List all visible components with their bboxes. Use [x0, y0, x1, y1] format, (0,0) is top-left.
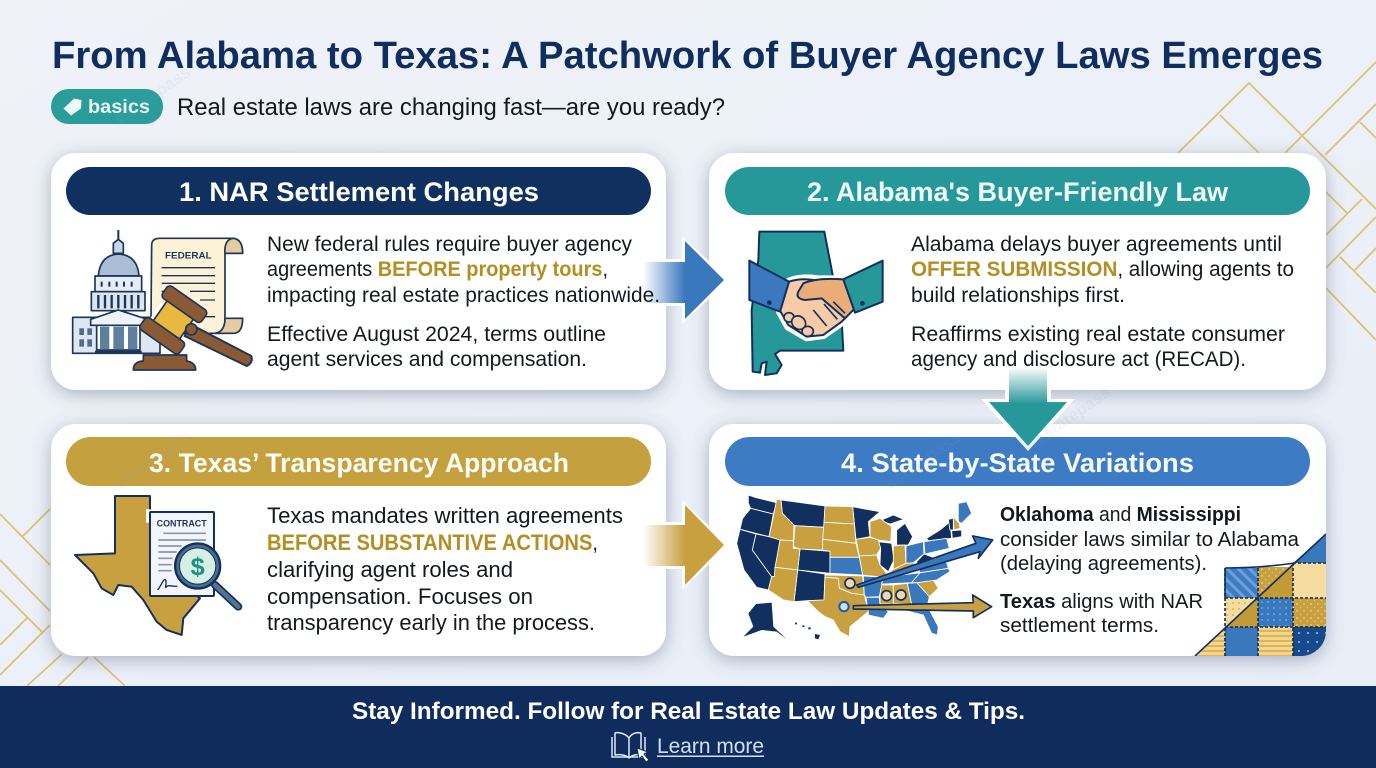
panel: Texas' transparency approach — [51, 424, 666, 656]
icon: Texas with contract and magnifier: $ — [191, 553, 205, 581]
heading: panel 3 — [66, 437, 651, 486]
tag: basics: basics — [88, 96, 150, 118]
heading: panel 1 — [66, 167, 651, 215]
text: panel 2: Alabama delays buyer agreements until — [911, 233, 1282, 256]
subtitle: Real estate laws are changing fast—are you ready? — [177, 94, 725, 121]
watermarks: estatepass — [111, 427, 194, 493]
arrow: panel 2 to panel 4 — [981, 367, 1075, 451]
text: panel 1 — [267, 233, 660, 371]
text: panel 4: (delaying agreements). — [1000, 552, 1207, 575]
panel: state-by-state variations — [709, 424, 1326, 656]
text: panel 4: consider laws similar to Alabama — [1000, 528, 1300, 551]
link: learn more: Learn more — [657, 735, 764, 758]
text: panel 2 — [911, 233, 1294, 371]
text: panel 3: clarifying agent roles and — [267, 557, 513, 582]
text: panel 1: New federal rules require buyer agency — [267, 233, 632, 256]
text: panel 2: agency and disclosure act (RECAD). — [911, 348, 1246, 371]
watermarks: estatepass — [111, 62, 194, 128]
arrow: panel 1 to panel 2 — [643, 236, 729, 324]
panel: NAR settlement changes — [51, 153, 666, 390]
arrow: Oklahoma and Mississippi callout — [857, 536, 993, 587]
tag: basics — [51, 89, 163, 124]
title: From Alabama to Texas: A Patchwork of Buyer Agency Laws Emerges — [52, 35, 1323, 77]
footer band — [0, 686, 1376, 768]
heading: panel 3: 3. Texas’ Transparency Approach — [149, 448, 569, 478]
text: panel 4: settlement terms. — [1000, 614, 1159, 637]
icon: capitol, federal scroll and gavel — [73, 230, 252, 370]
icon: Alabama with handshake — [749, 232, 883, 375]
text: panel 3: compensation. Focuses on — [267, 584, 533, 609]
map: United States colored by law status — [737, 495, 993, 639]
icon: open book with cursor — [612, 733, 649, 762]
heading: panel 2: 2. Alabama's Buyer-Friendly Law — [807, 177, 1228, 207]
text: panel 1: agreements BEFORE property tours, — [267, 258, 608, 281]
icon: capitol, federal scroll and gavel: FEDERAL — [165, 250, 212, 260]
text: panel 4: Texas aligns with NAR — [1000, 590, 1203, 613]
icon: patchwork quilt — [1195, 534, 1326, 656]
arrow: panel 3 to panel 4 — [643, 500, 729, 590]
heading: panel 4 — [725, 437, 1310, 486]
text: panel 4: Oklahoma and Mississippi — [1000, 503, 1241, 526]
watermarks: estatepass — [1031, 382, 1114, 448]
text: panel 3 — [267, 503, 623, 635]
text: panel 2: OFFER SUBMISSION, allowing agents to — [911, 258, 1294, 281]
text: panel 1: agent services and compensation. — [267, 348, 587, 371]
watermarks: estatepass — [881, 427, 964, 493]
text: panel 3: Texas mandates written agreements — [267, 503, 623, 528]
text: panel 1: Effective August 2024, terms outline — [267, 323, 606, 346]
panel: Alabama's buyer-friendly law — [709, 153, 1326, 390]
heading: panel 2 — [725, 167, 1310, 215]
icon: Texas with contract and magnifier: CONTRACT — [157, 519, 207, 529]
text: panel 3: BEFORE SUBSTANTIVE ACTIONS, — [267, 530, 598, 555]
text: panel 1: impacting real estate practices nationwide. — [267, 284, 660, 307]
heading: panel 4: 4. State-by-State Variations — [841, 448, 1194, 478]
arrow: Texas callout — [853, 595, 992, 618]
text: panel 2: Reaffirms existing real estate consumer — [911, 323, 1285, 346]
text: panel 4 — [1000, 503, 1300, 637]
icon: tag — [64, 98, 82, 116]
text: panel 2: build relationships first. — [911, 284, 1125, 307]
watermarks — [111, 62, 1114, 493]
icon: Texas with contract and magnifier — [75, 496, 238, 635]
text: panel 3: transparency early in the process. — [267, 610, 595, 635]
heading: panel 1: 1. NAR Settlement Changes — [179, 177, 539, 207]
footer call to action: Stay Informed. Follow for Real Estate Law Updates & Tips. — [352, 698, 1025, 725]
